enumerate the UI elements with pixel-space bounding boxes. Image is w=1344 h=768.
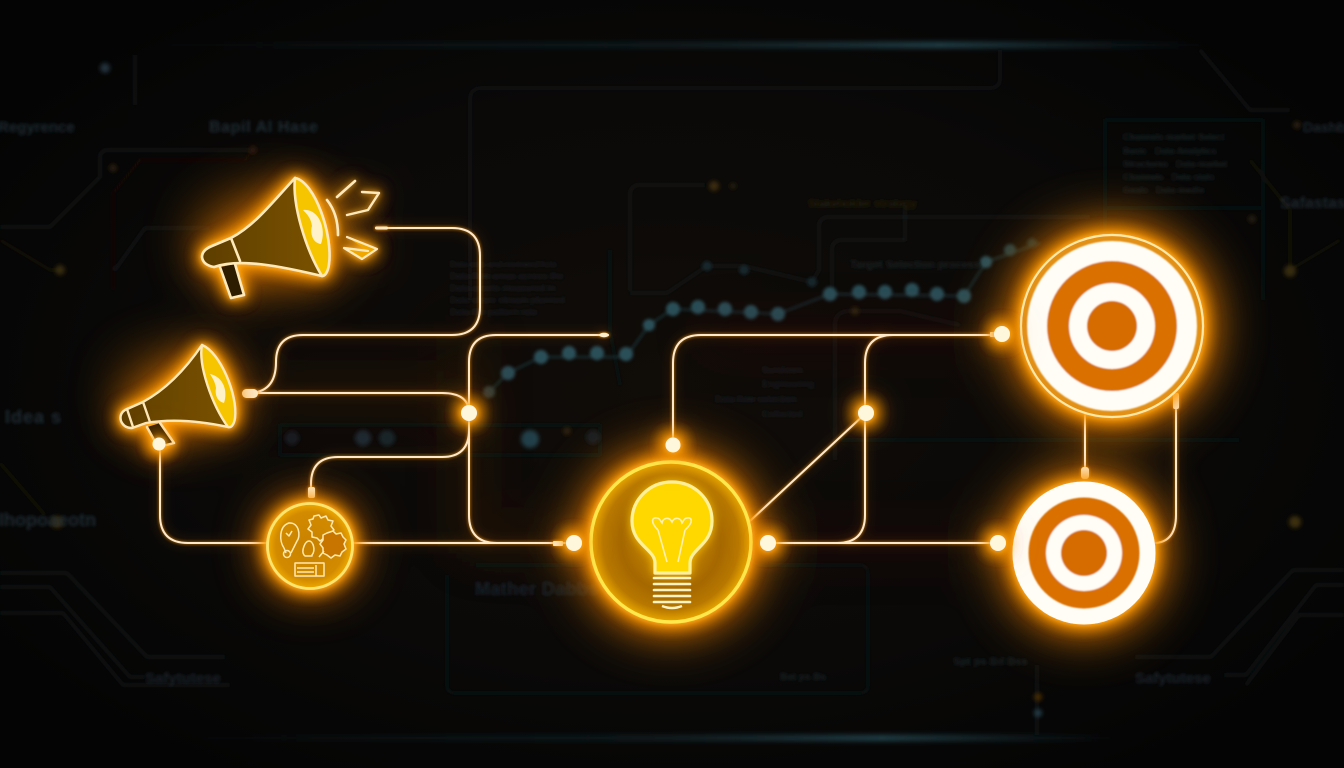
cap: bulb left bbox=[553, 541, 563, 546]
cap: large target right bbox=[1173, 393, 1179, 409]
cone bbox=[120, 345, 228, 428]
target inner bands bbox=[1028, 498, 1140, 608]
label: bottom right: Safytutese bbox=[1135, 670, 1211, 687]
wire: target to small target bbox=[1084, 415, 1086, 478]
filament legs bbox=[658, 530, 685, 562]
wire: junction to bulb output bbox=[775, 413, 865, 543]
crescent bbox=[210, 374, 225, 403]
wire: lower megaphone to hub bbox=[248, 393, 469, 413]
icon: light bulb circle bbox=[591, 462, 751, 622]
inner white band bbox=[1069, 283, 1155, 369]
bulb glass bbox=[632, 482, 712, 573]
table row: Basic - Data Analytics bbox=[1123, 146, 1217, 156]
icon: large target bbox=[1021, 235, 1203, 417]
row: right list: Collected bbox=[762, 409, 803, 419]
disc bbox=[591, 462, 751, 622]
ray: short bbox=[337, 181, 355, 197]
doodle: check bbox=[286, 531, 292, 536]
doodle: gear top bbox=[308, 515, 334, 541]
cone bbox=[202, 178, 322, 276]
faint indicator dots bbox=[51, 63, 1301, 717]
cap: arrow end bbox=[599, 333, 609, 337]
screw base bbox=[654, 578, 690, 602]
node: target left bbox=[994, 326, 1010, 342]
label: left lower: Ihopoaeotn bbox=[0, 510, 96, 530]
node: lower megaphone handle bbox=[152, 438, 166, 450]
ray: lower arrow bbox=[344, 237, 377, 259]
table header: Channels market Select bbox=[1123, 132, 1225, 142]
icon: small target bbox=[1012, 482, 1156, 624]
cap: target left bbox=[990, 332, 998, 337]
wire: ideas circle to bulb bbox=[354, 542, 565, 544]
label: left middle: Idea s bbox=[5, 407, 62, 427]
wire: lower megaphone to ideas circle bbox=[160, 445, 266, 543]
faint background labels bbox=[0, 119, 1344, 687]
icon: top megaphone bbox=[202, 178, 379, 298]
node: bulb right bbox=[760, 535, 776, 551]
junction nodes bbox=[152, 326, 1010, 551]
table row: Channels - Data stats bbox=[1123, 172, 1215, 182]
doodle: card bbox=[295, 563, 324, 576]
cap: lower megaphone bbox=[242, 389, 258, 398]
node: bulb top bbox=[666, 438, 680, 452]
doodle: bulb base bbox=[284, 550, 290, 558]
row: Data flow areas across the bbox=[450, 271, 564, 281]
outer ring bbox=[1021, 235, 1203, 417]
node: diagonal junction bbox=[858, 405, 874, 421]
handle bbox=[147, 423, 174, 447]
label: bottom left: Safytutese bbox=[145, 670, 221, 687]
row: right list: Data flow selection bbox=[715, 394, 797, 404]
ambient glow bbox=[120, 190, 1216, 635]
faint text block rows bbox=[450, 271, 814, 419]
icon: ideas circle bbox=[268, 504, 352, 588]
filament crown bbox=[653, 518, 691, 530]
table row: Goals - Data media bbox=[1123, 185, 1205, 195]
cap: ideas circle bbox=[308, 487, 315, 498]
doodle: gear right bbox=[320, 531, 346, 558]
top glow bar bbox=[130, 43, 1210, 47]
sound arc bbox=[327, 200, 338, 235]
bullseye bbox=[1087, 301, 1137, 351]
cap: small target top bbox=[1081, 467, 1089, 479]
cap: top wire bbox=[375, 226, 388, 230]
handle bbox=[220, 264, 244, 298]
row: Data assets measured in bbox=[450, 283, 556, 293]
wire: top megaphone to lower megaphone bbox=[248, 228, 480, 393]
label: top center left: Bapil Al Hase bbox=[209, 119, 318, 136]
wire: diagonal bbox=[750, 413, 866, 521]
wire end caps bbox=[242, 226, 1179, 546]
rim bbox=[295, 178, 330, 276]
wire: large target loop bbox=[1156, 395, 1176, 543]
crescent bbox=[303, 210, 323, 244]
doodle: stroke bbox=[319, 551, 324, 557]
label: bottom center: Spt ps Bd Bss bbox=[953, 656, 1028, 668]
wire: hub down to bulb bbox=[469, 413, 560, 543]
wire: bulb output to small target bbox=[775, 542, 990, 544]
bullseye bbox=[1061, 530, 1107, 576]
doodles bbox=[281, 515, 346, 576]
wire: junction up bbox=[865, 335, 893, 413]
faint table top right bbox=[1123, 132, 1228, 195]
label: panel title: Mather Dabbs bbox=[475, 579, 599, 599]
target bands bbox=[1027, 241, 1197, 411]
doodle: bulb bbox=[281, 523, 299, 553]
wire: hub to ideas circle bbox=[311, 430, 469, 497]
inner white band bbox=[1046, 515, 1122, 591]
node: small target left bbox=[990, 535, 1006, 551]
table row: Structures - Data market bbox=[1123, 159, 1228, 169]
orange band bbox=[1028, 498, 1140, 608]
divider bbox=[127, 402, 150, 427]
row: Data the pattern rate bbox=[450, 307, 538, 317]
icon: lower megaphone bbox=[120, 345, 235, 447]
node: bulb left bbox=[566, 535, 582, 551]
disc bbox=[268, 504, 352, 588]
node halos bbox=[148, 321, 1015, 556]
ray: upper arrow bbox=[347, 192, 379, 215]
wire: hub up to arrow end bbox=[469, 335, 608, 413]
row: right list: Engineering bbox=[762, 379, 814, 389]
base tip bbox=[662, 606, 682, 608]
faint teal data line bbox=[483, 238, 1040, 398]
row: right list: Sundown bbox=[762, 365, 802, 375]
wire: bulb top to target bbox=[673, 335, 995, 445]
orange band bbox=[1047, 261, 1177, 391]
white band bbox=[1027, 241, 1197, 411]
text block: center left: Data sets and reviewed lists bbox=[450, 260, 557, 269]
divider bbox=[231, 238, 240, 261]
label: chart caption: Target Selection process bbox=[850, 259, 980, 271]
label: bottom panel: Bat ps Bs bbox=[780, 672, 827, 683]
label: stakeholder: Stakeholder strategy bbox=[808, 198, 918, 210]
white band bbox=[1012, 482, 1156, 624]
connector wires bbox=[160, 228, 1176, 543]
doodle: small bulb bbox=[303, 541, 314, 556]
label: top left: Regyrence bbox=[0, 119, 75, 136]
bottom glow bar bbox=[170, 736, 1120, 740]
label: right upper: Safastas bbox=[1280, 195, 1344, 212]
node: hub bbox=[461, 405, 477, 421]
filament bbox=[653, 518, 691, 562]
row: Data share stream planned bbox=[450, 295, 565, 305]
rim bbox=[201, 345, 235, 427]
